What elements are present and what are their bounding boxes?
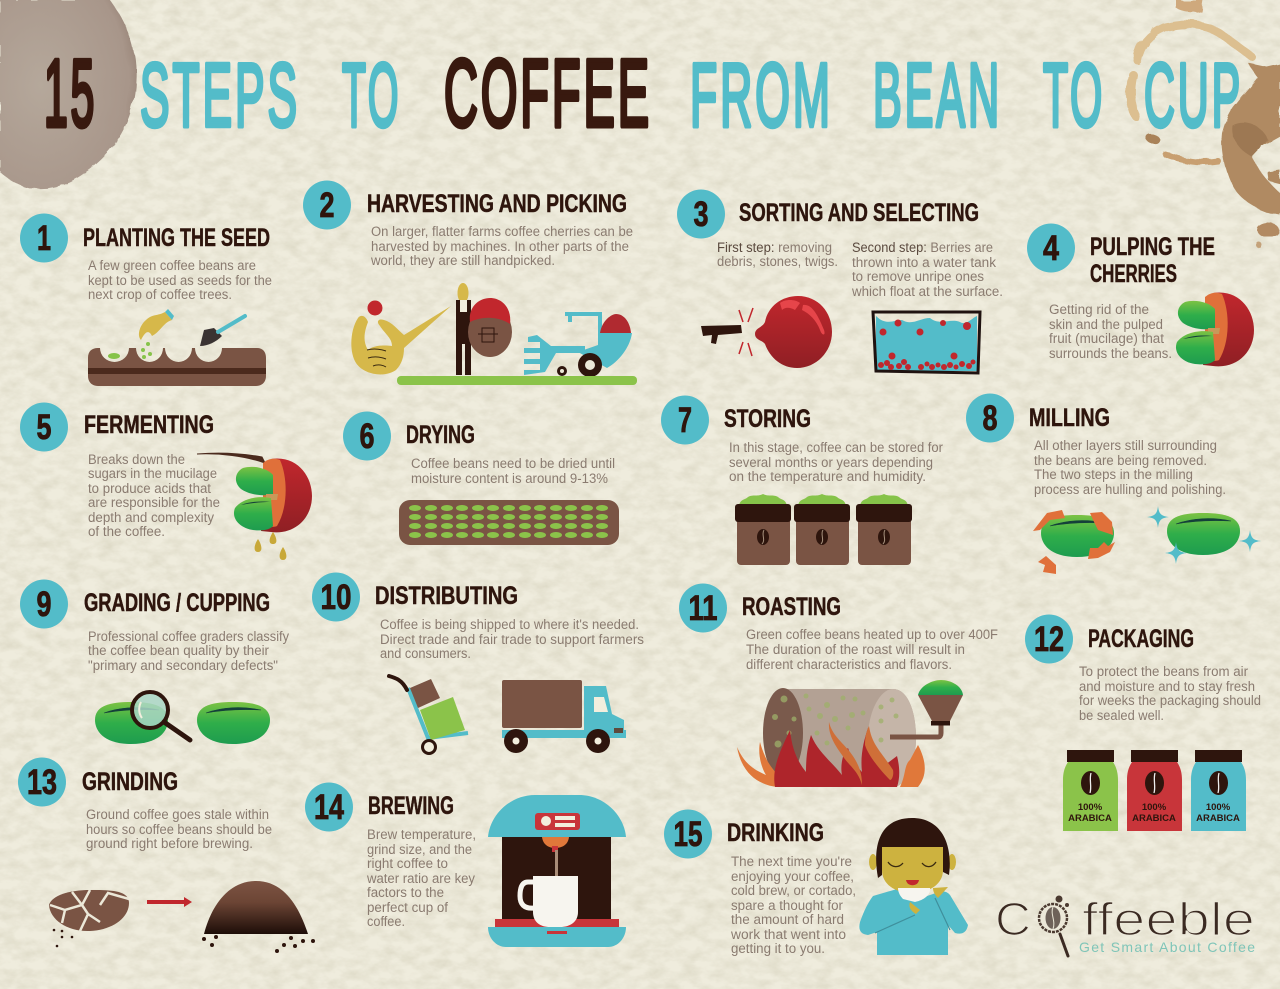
- badge 7: 7: [678, 401, 692, 440]
- badge 12: [1025, 614, 1073, 664]
- icon: split cherry: [1176, 293, 1254, 366]
- panel: step 5 fermenting: [20, 402, 312, 560]
- icon: storage sacks: [735, 494, 912, 565]
- description: second step: thrown into a water tank: [852, 255, 996, 270]
- badge 11: [679, 584, 727, 632]
- description: In this stage, coffee can be stored for: [729, 440, 943, 455]
- panel: step 13 grinding: [18, 758, 315, 953]
- icon: soil, hand and trowel: [88, 309, 266, 386]
- icon: fermenting cherry with drops: [234, 459, 312, 560]
- description: [1034, 438, 1226, 497]
- icon: cracked bean: [49, 890, 129, 947]
- description: coffee.: [367, 914, 405, 929]
- heading: GRINDING: [82, 768, 178, 796]
- heading: DRINKING: [727, 819, 824, 847]
- description: [730, 854, 856, 956]
- description: The duration of the roast will result in: [746, 642, 965, 657]
- panel: step 10 distributing: [312, 572, 644, 754]
- badge 2: [303, 180, 351, 230]
- description: harvested by machines. In other parts of the: [371, 239, 629, 254]
- icon: red coffee bag: [1127, 750, 1182, 831]
- description: the coffee bean quality by their: [88, 643, 269, 658]
- badge 8: [966, 394, 1014, 442]
- icon: delivery truck: [502, 680, 626, 753]
- description: the beans are being removed.: [1034, 453, 1207, 468]
- badge 7: [661, 396, 709, 444]
- icon: coffee machine: [488, 795, 626, 947]
- description: grind size, and the: [367, 842, 472, 857]
- description: All other layers still surrounding: [1034, 438, 1217, 453]
- description: fruit (mucilage) that: [1049, 331, 1164, 346]
- description: [411, 456, 615, 486]
- badge 4: [1027, 224, 1075, 272]
- badge 13: [18, 758, 66, 806]
- badge 13: 13: [27, 763, 57, 802]
- panel: step 6 drying: [343, 412, 619, 545]
- description: [729, 440, 943, 484]
- description: are responsible for the: [88, 495, 220, 510]
- description: depth and complexity: [88, 510, 214, 525]
- description: first step: debris, stones, twigs.: [717, 254, 838, 269]
- icon: green coffee bag: [1063, 750, 1118, 831]
- description: kept to be used as seeds for the: [88, 273, 272, 288]
- description: be sealed well.: [1079, 708, 1164, 723]
- heading: PACKAGING: [1088, 625, 1194, 653]
- title: STEPS: [140, 46, 300, 146]
- heading: SORTING AND SELECTING: [739, 199, 979, 227]
- badge 9: 9: [36, 585, 52, 624]
- title: [44, 40, 1243, 147]
- description: getting it to you.: [731, 941, 825, 956]
- badge 15: [664, 810, 712, 858]
- title: BEAN: [873, 46, 1002, 146]
- icon: hand picking a cherry: [351, 300, 451, 374]
- badge 14: [305, 782, 353, 832]
- heading: GRADING / CUPPING: [84, 589, 270, 617]
- title: TO: [1043, 46, 1105, 146]
- description: [366, 827, 476, 929]
- panel: step 2 harvesting and picking: [303, 180, 637, 385]
- icon: beans under magnifier: [95, 692, 270, 744]
- description: [380, 617, 644, 661]
- badge 5: 5: [36, 408, 52, 447]
- description: sugars in the mucilage: [88, 466, 217, 481]
- description: for weeks the packaging should: [1079, 693, 1261, 708]
- description: and moisture and to stay fresh: [1079, 679, 1255, 694]
- icon: ground coffee pile: [202, 881, 315, 953]
- icon: green coffee bag: 100%: [1078, 802, 1103, 813]
- description: first step: First step: removing: [717, 240, 832, 255]
- description: [746, 627, 998, 672]
- description: Green coffee beans heated up to over 400F: [746, 627, 998, 642]
- badge 9: [20, 580, 68, 628]
- icon: person drinking coffee: [859, 818, 968, 955]
- description: on the temperature and humidity.: [729, 469, 926, 484]
- description: work that went into: [730, 927, 846, 942]
- description: The next time you're: [731, 854, 852, 869]
- badge 14: 14: [314, 788, 344, 827]
- heading: [1090, 233, 1215, 288]
- badge 5: [20, 402, 68, 452]
- heading: CHERRIES: [1090, 260, 1177, 288]
- description: On larger, flatter farms coffee cherries can be: [371, 224, 633, 239]
- description: Direct trade and fair trade to support farmers: [380, 632, 644, 647]
- description: second step: which float at the surface.: [851, 284, 1003, 299]
- description: Coffee beans need to be dried until: [411, 456, 615, 471]
- description: Coffee is being shipped to where it's needed.: [380, 617, 639, 632]
- logo: Coffeeble: [995, 893, 1255, 956]
- description: [1079, 664, 1261, 723]
- description: second step: to remove unripe ones: [852, 269, 984, 284]
- description: water ratio are key: [366, 871, 475, 886]
- badge 4: 4: [1043, 229, 1059, 268]
- logo: Coffeeble: C: [995, 893, 1031, 945]
- description: next crop of coffee trees.: [88, 287, 232, 302]
- description: skin and the pulped: [1049, 317, 1163, 332]
- description: Getting rid of the: [1049, 302, 1149, 317]
- description: [88, 258, 272, 302]
- title: COFFEE: [444, 40, 652, 147]
- icon: twig hitting cherry: [701, 296, 832, 368]
- description: [88, 629, 289, 673]
- heading: DRYING: [406, 421, 475, 449]
- description: The two steps in the milling: [1034, 467, 1193, 482]
- title: FROM: [690, 46, 833, 146]
- description: first step: [717, 240, 838, 269]
- title: TO: [342, 46, 401, 146]
- heading: MILLING: [1029, 404, 1110, 432]
- title: 15: [44, 40, 97, 147]
- icon: red coffee bag: 100%: [1142, 802, 1167, 813]
- badge 15: 15: [674, 815, 702, 854]
- description: factors to the: [367, 885, 444, 900]
- description: to produce acids that: [88, 481, 211, 496]
- heading: FERMENTING: [84, 411, 214, 439]
- badge 3: [677, 190, 725, 238]
- description: the amount of hard: [731, 912, 844, 927]
- coffee stain: top left: [0, 0, 136, 189]
- icon: farmer with basket: [456, 283, 512, 375]
- heading: ROASTING: [742, 593, 841, 621]
- description: second step: [851, 240, 1003, 299]
- icon: green coffee bag: ARABICA: [1068, 813, 1112, 824]
- badge 11: 11: [688, 589, 718, 628]
- description: moisture content is around 9-13%: [411, 471, 608, 486]
- description: cold brew, or cortado,: [731, 883, 856, 898]
- panel: step 12 packaging: [1025, 614, 1261, 831]
- icon: drying tray: [399, 500, 619, 545]
- panel: step 4 pulping the cherries: [1027, 224, 1254, 366]
- icon: magnifier with coffee bean: [1039, 896, 1069, 956]
- badge 6: [343, 412, 391, 460]
- panel: step 7 storing: [661, 396, 943, 565]
- panel: step 9 grading and cupping: [20, 580, 289, 744]
- panel: step 8 milling: [966, 394, 1261, 574]
- panel: step 1 planting the seed: [20, 214, 272, 386]
- badge 1: 1: [37, 219, 51, 258]
- description: different characteristics and flavors.: [746, 657, 952, 672]
- icon: red coffee bag: ARABICA: [1132, 813, 1176, 824]
- description: [86, 807, 272, 851]
- icon: harvesting machine: [524, 314, 632, 377]
- heading: STORING: [724, 405, 811, 433]
- arrow: [147, 897, 192, 907]
- heading: DISTRIBUTING: [375, 582, 518, 610]
- heading: HARVESTING AND PICKING: [367, 190, 627, 218]
- icon: blue coffee bag: [1191, 750, 1246, 831]
- description: "primary and secondary defects": [88, 658, 278, 673]
- badge 10: 10: [320, 578, 352, 617]
- description: right coffee to: [367, 856, 448, 871]
- icon: blue coffee bag: ARABICA: [1196, 813, 1240, 824]
- ground bar: [397, 376, 637, 385]
- badge 8: 8: [982, 399, 998, 438]
- description: world, they are still handpicked.: [370, 253, 555, 268]
- description: perfect cup of: [367, 900, 448, 915]
- description: of the coffee.: [88, 524, 165, 539]
- description: Brew temperature,: [367, 827, 476, 842]
- icon: water tank with cherries: [873, 312, 980, 373]
- badge 6: 6: [360, 417, 374, 456]
- badge 10: [312, 572, 360, 622]
- badge 3: 3: [694, 195, 708, 234]
- arrow: [197, 453, 265, 463]
- badge 2: 2: [320, 186, 334, 225]
- icon: polished bean with sparkles: [1147, 506, 1261, 564]
- description: and consumers.: [380, 646, 471, 661]
- description: process are hulling and polishing.: [1034, 482, 1226, 497]
- heading: PULPING THE: [1090, 233, 1215, 261]
- description: enjoying your coffee,: [731, 869, 854, 884]
- description: [1049, 302, 1172, 361]
- description: Ground coffee goes stale within: [86, 807, 269, 822]
- description: spare a thought for: [731, 898, 843, 913]
- coffee stain: top right ring and splash: [1131, 0, 1280, 248]
- panel: step 11 roasting: [679, 584, 998, 787]
- description: ground right before brewing.: [86, 836, 253, 851]
- badge 1: [20, 214, 68, 262]
- panel: step 3 sorting and selecting: [677, 190, 1003, 373]
- description: Breaks down the: [88, 452, 185, 467]
- description: several months or years depending: [729, 455, 933, 470]
- description: second step: Second step: Berries are: [852, 240, 993, 255]
- icon: blue coffee bag: 100%: [1206, 802, 1231, 813]
- description: hours so coffee beans should be: [86, 822, 272, 837]
- panel: step 14 brewing: [305, 782, 626, 947]
- icon: roasting drum over fire: [737, 680, 963, 787]
- logo: Coffeeble: ffeeble: [1082, 893, 1255, 945]
- panel: step 15 drinking: [664, 810, 968, 956]
- badge 12: 12: [1034, 620, 1064, 659]
- heading: PLANTING THE SEED: [83, 224, 270, 252]
- description: [88, 452, 220, 539]
- description: Professional coffee graders classify: [88, 629, 289, 644]
- heading: BREWING: [368, 792, 454, 820]
- description: A few green coffee beans are: [88, 258, 256, 273]
- icon: hand trolley: [389, 676, 468, 754]
- logo: Coffeeble: Get Smart About Coffee: [1079, 939, 1255, 955]
- description: surrounds the beans.: [1049, 346, 1172, 361]
- icon: hulling bean: [1033, 510, 1115, 574]
- description: To protect the beans from air: [1079, 664, 1248, 679]
- description: [370, 224, 633, 268]
